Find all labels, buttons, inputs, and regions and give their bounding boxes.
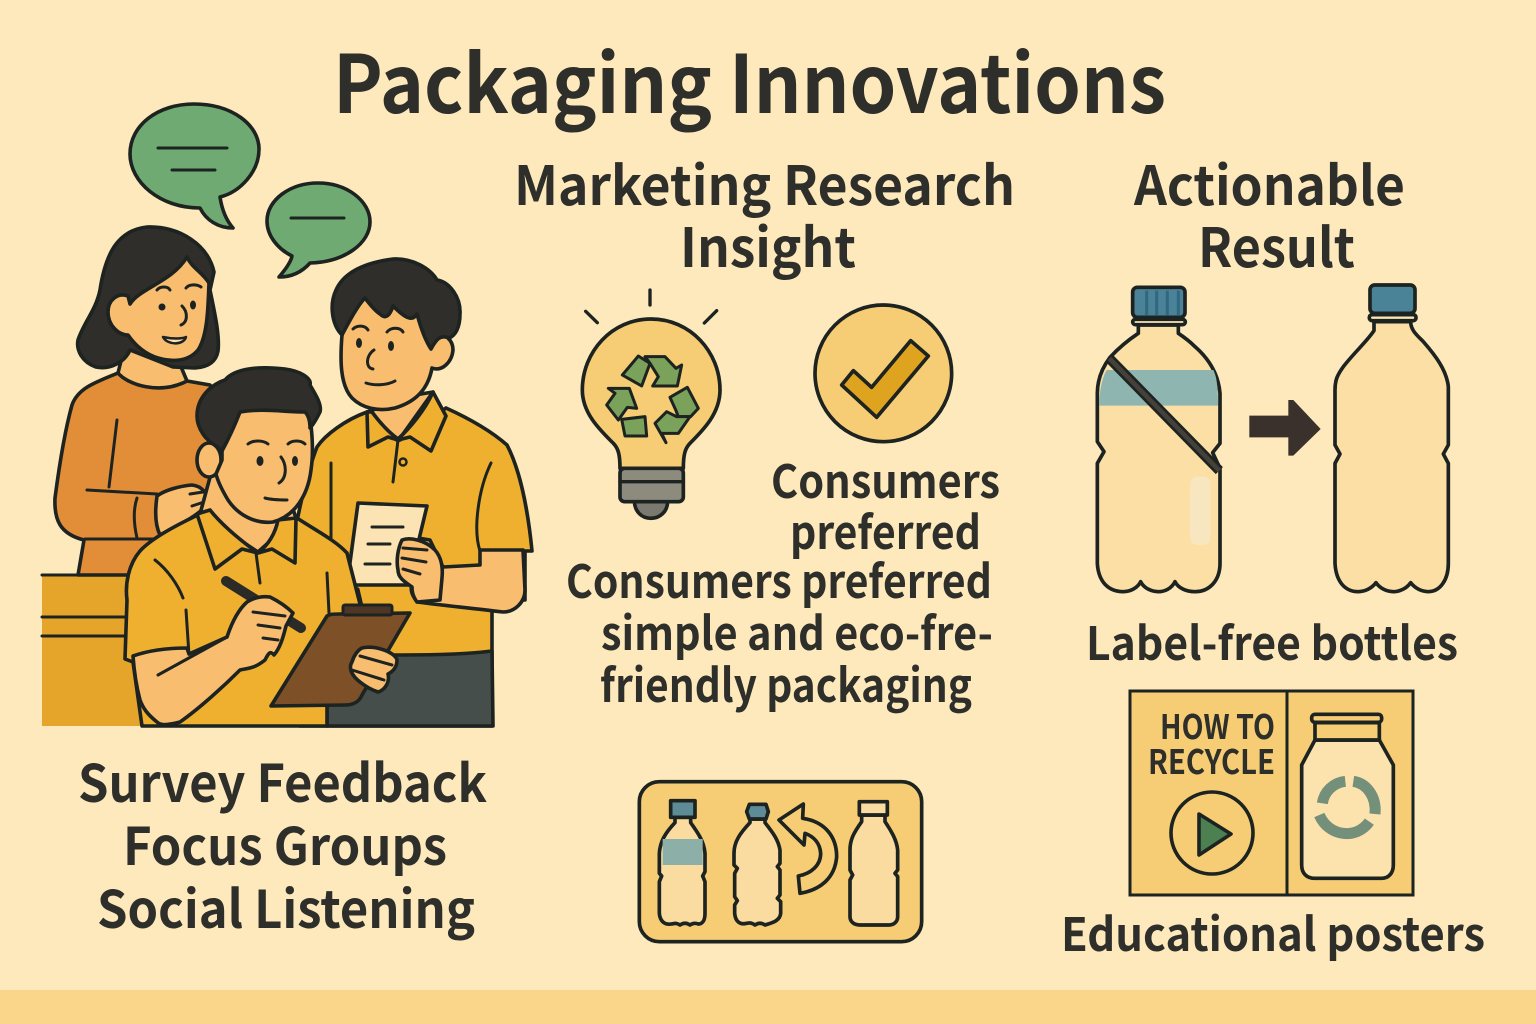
- caption: educational posters: Educational posters: [1061, 899, 1485, 965]
- bottle without label: [1335, 285, 1448, 592]
- icon: panel of bottles with arrow: [639, 782, 922, 942]
- heading: actionable result: Result: [1198, 204, 1355, 283]
- icon: bottle with label to label-free bottle: [1097, 285, 1448, 592]
- poster heading: [1148, 700, 1275, 784]
- heading: actionable result: Actionable: [1133, 142, 1405, 221]
- text: research methods: Focus Groups: [123, 805, 447, 880]
- text: research methods: Survey Feedback: [78, 742, 488, 817]
- heading: marketing research insight: Marketing Research: [514, 142, 1015, 221]
- pen: [226, 581, 301, 628]
- heading: marketing research insight: Insight: [680, 204, 856, 283]
- illustration: research team with speech bubbles: [42, 104, 532, 726]
- text: consumers preferred: Consumers: [771, 446, 1000, 512]
- bottle with label: [659, 801, 705, 925]
- poster: how to recycle: [1130, 691, 1413, 895]
- speech bubble: large: [130, 104, 259, 228]
- text: consumers preferred: [771, 446, 1000, 563]
- icon: play button: [1171, 792, 1253, 874]
- title: Packaging Innovations: [333, 21, 1166, 137]
- man seated front: [125, 368, 410, 726]
- text: research methods: Social Listening: [97, 868, 475, 943]
- text: research methods: [78, 742, 488, 943]
- hand on shoulder: [156, 485, 208, 535]
- bottle with label: [1097, 287, 1220, 592]
- woman: [55, 227, 240, 575]
- text: simple and eco-friendly packaging: friendly packaging: [600, 650, 972, 716]
- heading: actionable result: [1133, 142, 1405, 283]
- text: simple and eco-friendly packaging: [566, 546, 993, 716]
- arrow: [1249, 400, 1321, 456]
- holding hand: [397, 539, 442, 602]
- text: simple and eco-friendly packaging: Consumers preferred: [566, 546, 992, 612]
- bottle unlabelled: [734, 804, 781, 925]
- caption: label-free bottles: Label-free bottles: [1086, 608, 1458, 674]
- speech bubble: small: [267, 183, 370, 277]
- writing arm: [133, 597, 293, 725]
- heading: marketing research insight: [514, 142, 1015, 283]
- icon: jar with recycle arrows: [1302, 714, 1393, 878]
- bottle plain: [850, 802, 898, 925]
- icon: check mark badge: [815, 305, 952, 442]
- curved return arrow: [779, 804, 837, 893]
- box on the desk: [42, 575, 202, 726]
- paper note: [347, 503, 427, 585]
- text: consumers preferred: preferred: [790, 497, 981, 563]
- man standing right: [290, 259, 532, 726]
- poster heading: HOW TO: [1160, 700, 1275, 749]
- poster heading: RECYCLE: [1148, 735, 1275, 784]
- text: simple and eco-friendly packaging: simple and eco-fre-: [601, 598, 993, 664]
- clipboard: [271, 605, 410, 706]
- icon: light bulb with recycling symbol: [582, 290, 720, 518]
